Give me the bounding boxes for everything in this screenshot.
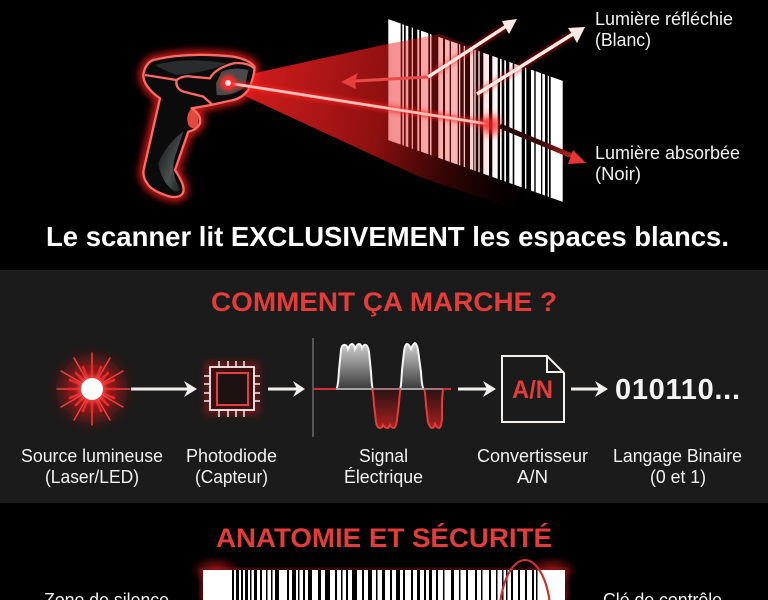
label: binary language: Langage Binaire [613,446,742,466]
panel: how it works background [0,270,768,503]
heading: how it works: COMMENT ÇA MARCHE ? [211,287,557,317]
icon: light source [57,353,130,425]
label: photodiode: (Capteur) [195,467,268,487]
label: electrical signal: Électrique [344,467,423,487]
icon: barcode scanner [143,55,254,197]
arrow: photodiode to signal [268,381,305,397]
label: absorbed light: (Noir) [595,164,641,184]
label: photodiode [186,446,277,487]
label: binary language [613,446,742,487]
label: absorbed light: Lumière absorbée [595,143,740,163]
label: light source: Source lumineuse [21,446,163,466]
barcode anatomy [190,556,578,600]
reflected light arrow 1 [428,19,517,77]
light cone [232,42,540,218]
heading: anatomy and security: ANATOMIE ET SÉCURITÉ [216,522,552,553]
label: converter: A/N [517,467,548,487]
label: converter: Convertisseur [477,446,588,466]
label: reflected light: Lumière réfléchie [595,9,733,29]
absorbed light arrow [500,126,586,164]
label: reflected light [595,9,733,50]
arrow: converter to binary [571,381,608,397]
red light tint on barcode [388,34,500,180]
headline: Le scanner lit EXCLUSIVEMENT les espaces blancs. [46,221,729,252]
label: electrical signal [344,446,423,487]
label: light source [21,446,163,487]
reflected light arrow 2 [477,27,585,94]
chart: electrical signal [313,338,451,437]
laser beam [220,75,501,135]
arrow: source to photodiode [131,381,197,397]
arrow: signal to converter [458,381,496,397]
icon: photodiode chip [204,361,260,417]
label: absorbed light [595,143,740,184]
label: photodiode: Photodiode [186,446,277,466]
label: binary language: (0 et 1) [650,467,706,487]
binary output: 010110... [615,374,740,406]
icon: A/N converter document: A/N [512,376,553,404]
label: converter [477,446,588,487]
label: electrical signal: Signal [359,446,408,466]
barcode in perspective [388,19,563,203]
label: reflected light: (Blanc) [595,30,651,50]
label: light source: (Laser/LED) [45,467,139,487]
icon: A/N converter document [502,356,564,422]
return light arrow [341,73,428,89]
